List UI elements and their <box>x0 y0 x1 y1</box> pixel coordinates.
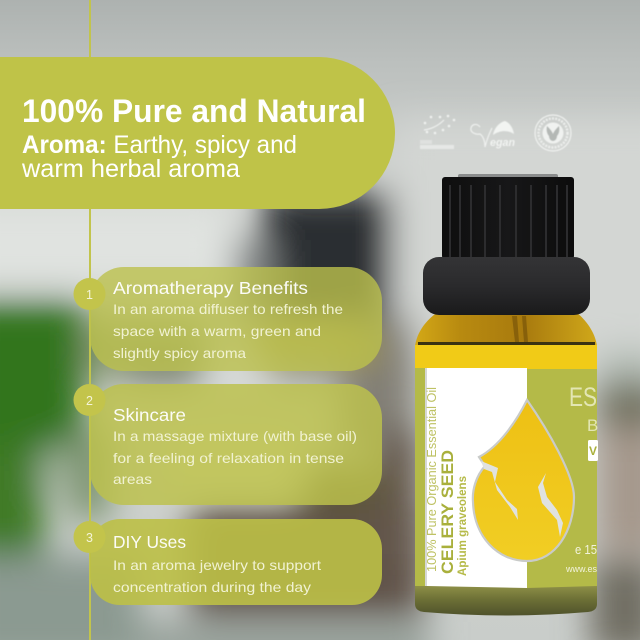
label: vertical product text <box>425 387 469 576</box>
icon: vegan mark <box>471 121 515 149</box>
label: vertical product text: 100% Pure Organic Essential Oil <box>425 387 439 572</box>
label: brand text cropped: B <box>587 416 598 435</box>
product: essential oil bottle <box>415 174 598 616</box>
panel: skincare <box>90 384 382 505</box>
badge: step 1: 1 <box>86 288 93 302</box>
badge: step 2: 2 <box>86 394 93 408</box>
bottle cap ribbed <box>442 174 574 259</box>
icon: vegan mark: egan <box>490 137 515 149</box>
label: brand text cropped: e 15 <box>575 542 597 557</box>
icon: no animal testing badge <box>535 115 571 151</box>
bottle shoulder <box>415 312 597 346</box>
panel: headline banner <box>0 57 395 209</box>
aroma description: warm herbal aroma <box>21 155 240 183</box>
body text <box>113 557 321 595</box>
body text: space with a warm, green and <box>113 323 321 339</box>
body text: areas <box>113 471 152 487</box>
label: brand text cropped: V <box>589 444 597 458</box>
body text <box>113 428 357 487</box>
body text: slightly spicy aroma <box>113 345 246 361</box>
heading: Aromatherapy Benefits <box>113 278 308 298</box>
badge: step 1 <box>74 278 106 310</box>
body text: for a feeling of relaxation in tense <box>113 450 344 466</box>
label: vertical product text: CELERY SEED <box>438 450 457 574</box>
heading: Skincare <box>113 405 186 425</box>
bottle base <box>415 586 597 616</box>
badge: step 2 <box>74 384 106 416</box>
panel: aromatherapy benefits <box>90 267 382 371</box>
label: silver edge <box>425 368 427 586</box>
label: vertical product text: Apium graveolens <box>455 476 469 576</box>
bottle body top band <box>415 345 597 370</box>
bottle collar <box>423 257 590 315</box>
badge: step 3: 3 <box>86 531 93 545</box>
label: oil drop logo <box>473 400 574 561</box>
label: left olive strip <box>415 368 425 586</box>
label: right olive panel <box>527 369 597 588</box>
body text: In a massage mixture (with base oil) <box>113 428 357 444</box>
heading: DIY Uses <box>113 532 186 552</box>
title: 100% Pure and Natural <box>22 93 366 129</box>
body text <box>113 301 343 361</box>
aroma description: Aroma: Earthy, spicy and <box>22 131 297 159</box>
body text: concentration during the day <box>113 579 311 595</box>
label: brand text cropped: www.es <box>565 564 597 575</box>
aroma description <box>21 131 297 183</box>
badge: step 3 <box>74 521 106 553</box>
label: white panel <box>427 368 527 588</box>
icon: organic leaf certification <box>420 115 455 149</box>
vertical timeline line <box>89 0 91 640</box>
label: brand text cropped: ES <box>569 382 597 412</box>
body text: In an aroma jewelry to support <box>113 557 321 573</box>
panel: DIY uses <box>90 519 382 605</box>
body text: In an aroma diffuser to refresh the <box>113 301 343 317</box>
label: brand text cropped <box>565 382 598 575</box>
